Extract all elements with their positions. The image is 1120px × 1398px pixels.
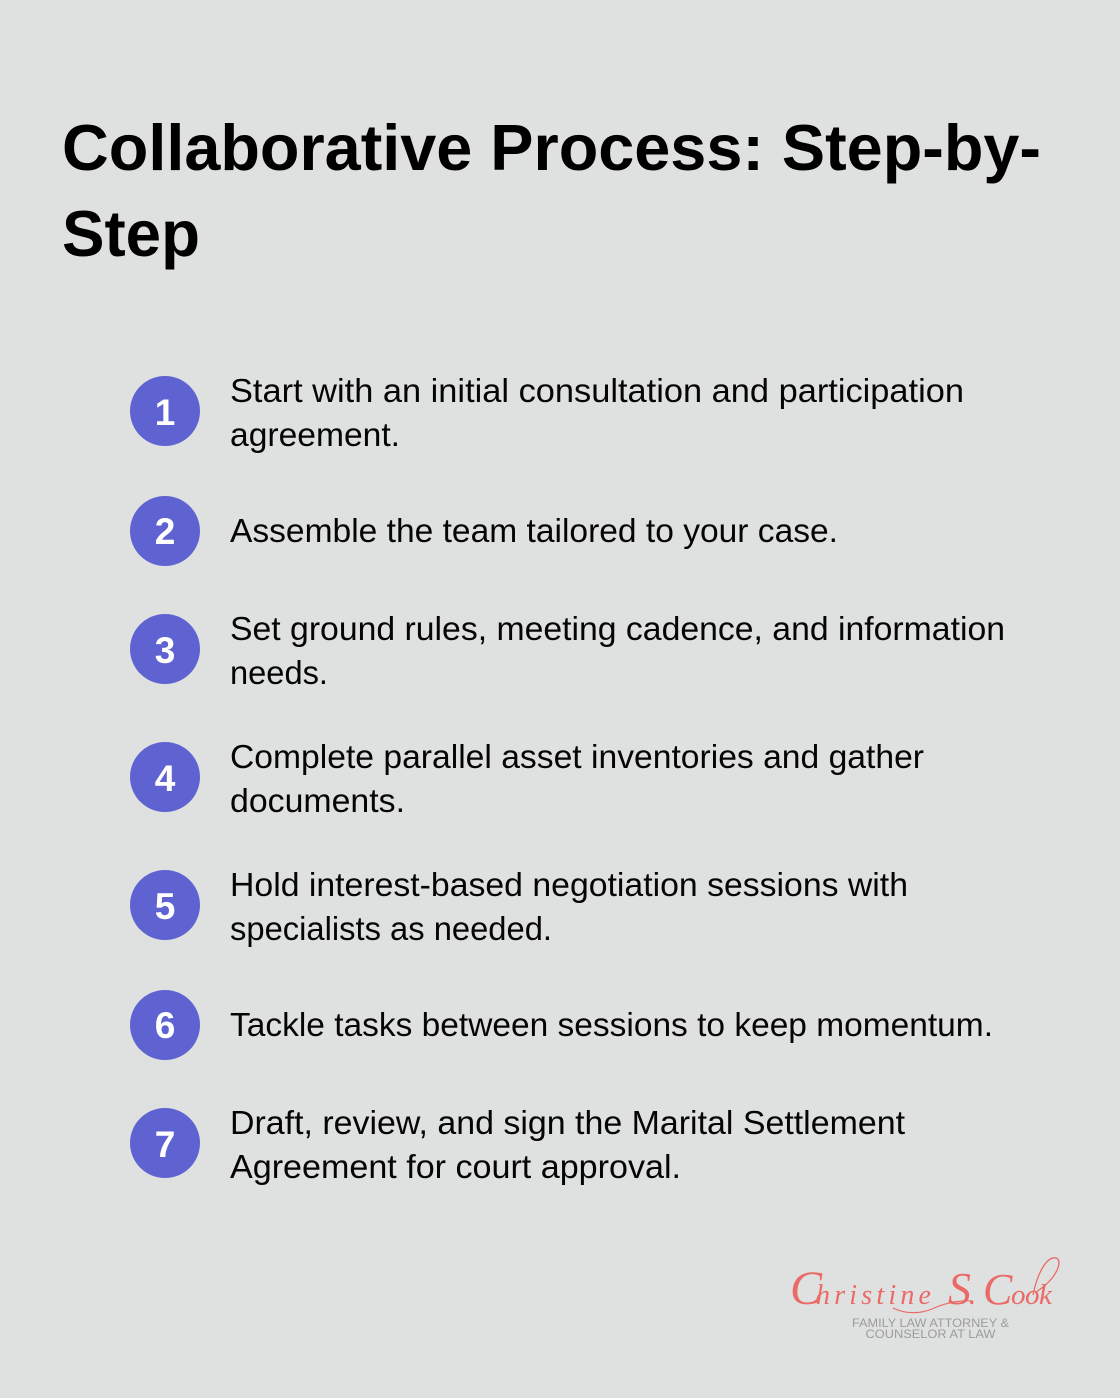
logo: Christine S. Cook: ook <box>1011 1279 1053 1311</box>
step 1 text: Start with an initial consultation and participation <box>230 372 964 409</box>
number badge 3: 3 <box>155 630 175 671</box>
step 3 text: Set ground rules, meeting cadence, and information <box>230 610 1005 647</box>
number badge 1 <box>130 376 200 446</box>
number badge 2: 2 <box>155 511 175 552</box>
title <box>62 111 1041 270</box>
number badge 6: 6 <box>155 1005 175 1046</box>
step 5 <box>130 866 908 947</box>
logo: Christine S. Cook: FAMILY LAW ATTORNEY & <box>852 1318 1009 1330</box>
step 1 <box>130 372 964 453</box>
logo: Christine S. Cook: S <box>948 1263 971 1314</box>
step 7 <box>130 1104 905 1185</box>
step 3 text <box>230 610 1005 691</box>
number badge 3 <box>130 614 200 684</box>
step 7 text: Draft, review, and sign the Marital Settlement <box>230 1104 905 1141</box>
step 7 text: Agreement for court approval. <box>230 1148 681 1185</box>
step 5 text: Hold interest-based negotiation sessions with <box>230 866 908 903</box>
step 4 <box>130 738 924 819</box>
logo: Christine S. Cook: C <box>983 1265 1013 1314</box>
number badge 5: 5 <box>155 886 175 927</box>
logo: Christine S. Cook <box>790 1258 1059 1341</box>
number badge 4 <box>130 742 200 812</box>
logo: Christine S. Cook: . <box>969 1280 983 1311</box>
step 2 <box>130 496 838 566</box>
number badge 4: 4 <box>155 758 176 799</box>
title: Collaborative Process: Step-by- <box>62 111 1041 184</box>
step 6 text: Tackle tasks between sessions to keep momentum. <box>230 1006 993 1043</box>
number badge 6 <box>130 990 200 1060</box>
step 5 text <box>230 866 908 947</box>
step 3 <box>130 610 1005 691</box>
step 6 <box>130 990 993 1060</box>
number badge 7 <box>130 1108 200 1178</box>
number badge 1: 1 <box>155 392 175 433</box>
step 1 text <box>230 372 964 453</box>
title: Step <box>62 197 200 270</box>
step 5 text: specialists as needed. <box>230 910 552 947</box>
logo: Christine S. Cook: hristine <box>816 1280 946 1311</box>
step 2 text: Assemble the team tailored to your case. <box>230 512 838 549</box>
number badge 2 <box>130 496 200 566</box>
number badge 7: 7 <box>155 1124 175 1165</box>
step 3 text: needs. <box>230 654 328 691</box>
step 7 text <box>230 1104 905 1185</box>
step 4 text <box>230 738 924 819</box>
logo: Christine S. Cook: C <box>790 1262 823 1315</box>
step 1 text: agreement. <box>230 416 400 453</box>
step 4 text: Complete parallel asset inventories and gather <box>230 738 924 775</box>
number badge 5 <box>130 870 200 940</box>
step 4 text: documents. <box>230 782 405 819</box>
logo: Christine S. Cook: COUNSELOR AT LAW <box>866 1329 996 1341</box>
